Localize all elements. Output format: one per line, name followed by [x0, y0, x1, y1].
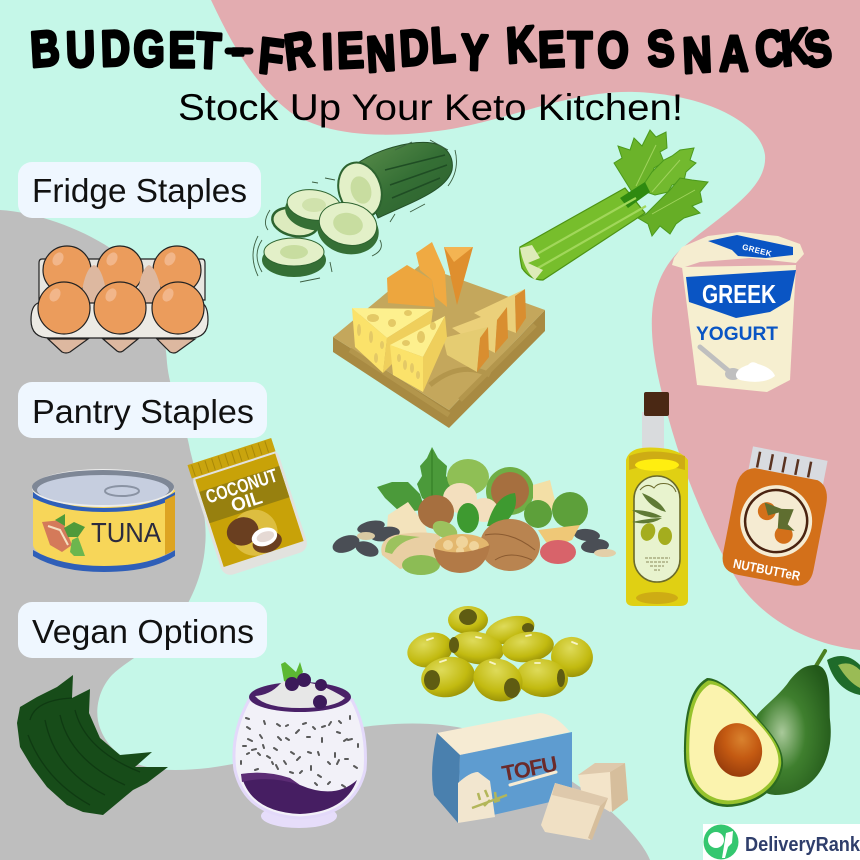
background: pink blob [211, 0, 860, 650]
subtitle: Stock Up Your Keto Kitchen! [178, 87, 683, 128]
panel: Vegan Options label: Vegan Options [32, 613, 254, 650]
icon: yogurt cup: GREEK [702, 279, 776, 309]
icon: nut butter jar: NUTBUTTeR [732, 556, 802, 584]
icon: nut butter jar [720, 445, 834, 589]
icon: seaweed [17, 675, 168, 815]
background: gray blob [0, 210, 650, 860]
icon: tuna can [32, 469, 175, 572]
icon: mixed nuts [330, 447, 616, 575]
icon: green olives [403, 606, 597, 708]
icon: egg carton [31, 246, 208, 353]
icon: cucumber [253, 140, 456, 282]
icon: coconut oil jar [187, 437, 310, 577]
panel: Pantry Staples label [18, 382, 267, 438]
icon: tuna can: TUNA [91, 517, 161, 548]
icon: olive oil bottle [626, 392, 688, 606]
icon: yogurt cup: YOGURT [696, 324, 778, 345]
icon: yogurt cup [672, 232, 804, 392]
panel: Fridge Staples label [18, 162, 261, 218]
icon: celery [520, 130, 708, 280]
panel: Fridge Staples label: Fridge Staples [32, 172, 247, 209]
logo: DeliveryRank [703, 824, 860, 860]
icon: tofu: TOFU [500, 751, 560, 786]
panel: Pantry Staples label: Pantry Staples [32, 393, 254, 430]
icon: coconut oil jar: OIL [229, 487, 266, 517]
panel: Vegan Options label [18, 602, 267, 658]
icon: yogurt cup: GREEK [741, 242, 773, 259]
icon: tofu [432, 713, 628, 840]
icon: avocado [684, 651, 860, 807]
title: BUDGET-FRIENDLY KETO SNACKS [29, 15, 834, 86]
icon: cheese board [333, 242, 545, 428]
icon: coconut oil jar: COCONUT [203, 465, 281, 508]
icon: chia pudding [234, 662, 365, 828]
